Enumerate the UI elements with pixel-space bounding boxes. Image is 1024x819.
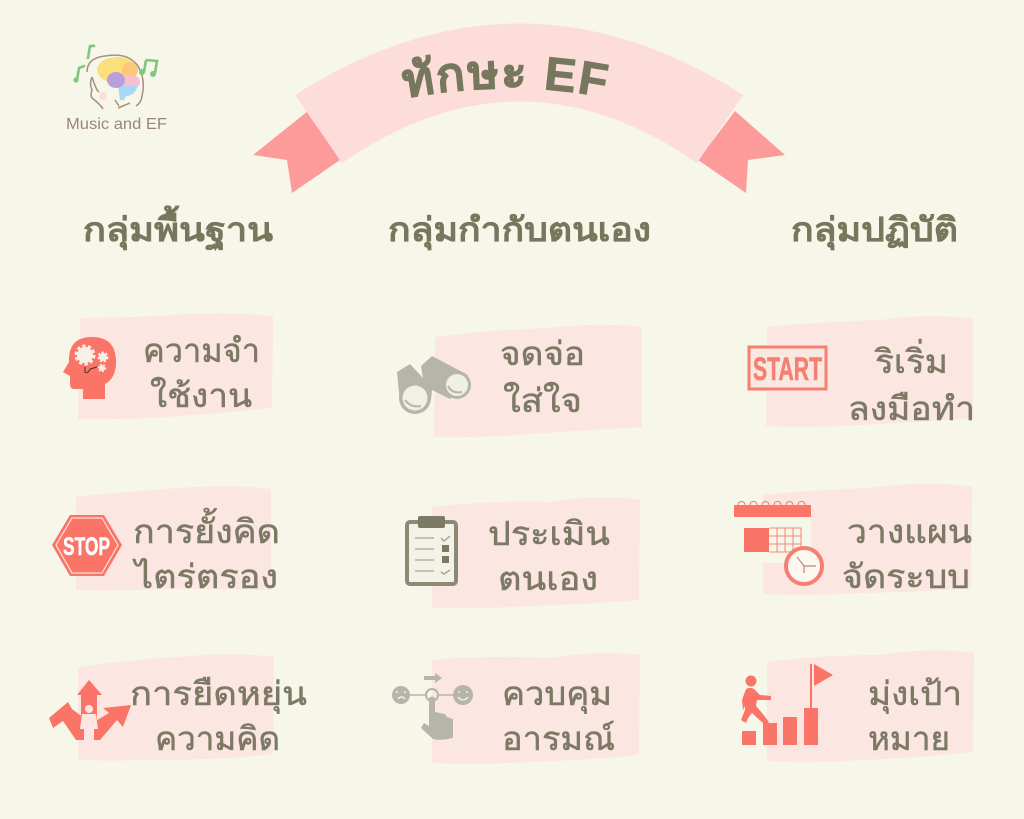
label: จดจ่อ [500, 335, 585, 372]
label: การยั้งคิด [133, 508, 280, 550]
panel: ความจำใช้งาน: ใช้งาน [150, 377, 252, 414]
label: ความจำ [143, 332, 260, 369]
ribbon left tail [253, 111, 340, 193]
panel: จดจ่อใส่ใจ: ใส่ใจ [503, 382, 582, 419]
panel: ประเมินตนเอง: ตนเอง [498, 560, 598, 597]
panel: ความจำใช้งาน [63, 313, 273, 419]
panel: การยืดหยุ่นความคิด: ความคิด [155, 720, 280, 757]
panel: มุ่งเป้าหมาย [741, 650, 974, 762]
icon: head with gears [63, 337, 116, 399]
icon: binoculars [397, 356, 471, 414]
panel: ประเมินตนเอง [407, 497, 640, 608]
panel: ริเริ่มลงมือทำ [749, 316, 975, 427]
label: ประเมิน [488, 515, 610, 552]
icon: start sign [749, 347, 826, 389]
ribbon arc [295, 24, 743, 163]
title ribbon [253, 24, 785, 193]
panel: การยืดหยุ่นความคิด [49, 654, 307, 760]
heading: กลุ่มพื้นฐาน: กลุ่มพื้นฐาน [83, 205, 273, 251]
heading: กลุ่มกำกับตนเอง: กลุ่มกำกับตนเอง [388, 211, 651, 251]
icon: person climbing steps to flag [741, 664, 833, 745]
icon: start sign: START [753, 351, 822, 387]
ribbon right tail [698, 111, 785, 193]
icon: stop sign [52, 515, 122, 576]
icon: clipboard [407, 516, 456, 584]
label: วางแผน [847, 513, 972, 550]
panel: วางแผนจัดระบบ: จัดระบบ [842, 558, 970, 595]
icon: calendar and clock [734, 502, 822, 584]
label: การยืดหยุ่น [130, 675, 307, 714]
label: ริเริ่ม [874, 339, 948, 380]
panel: การยั้งคิดไตร่ตรอง: ไตร่ตรอง [132, 558, 278, 595]
title: ทักษะ EF [402, 54, 609, 98]
label: ควบคุม [502, 675, 612, 714]
panel: ควบคุมอารมณ์ [392, 653, 640, 764]
logo: Music and EF [66, 46, 167, 133]
icon: stop sign: STOP [63, 533, 110, 561]
icon: emotion slider with hand [392, 673, 473, 740]
panel: ริเริ่มลงมือทำ: ลงมือทำ [848, 390, 975, 427]
panel: จดจ่อใส่ใจ [397, 325, 642, 437]
label: มุ่งเป้า [868, 675, 962, 714]
heading: กลุ่มปฏิบัติ: กลุ่มปฏิบัติ [791, 211, 958, 251]
panel: มุ่งเป้าหมาย: หมาย [868, 720, 950, 757]
panel: วางแผนจัดระบบ [734, 484, 972, 595]
panel: การยั้งคิดไตร่ตรอง [52, 486, 280, 595]
logo: Music and EF: Music and EF [66, 116, 167, 133]
panel: ควบคุมอารมณ์: อารมณ์ [502, 720, 615, 757]
icon: three-way arrows with person [49, 680, 131, 740]
